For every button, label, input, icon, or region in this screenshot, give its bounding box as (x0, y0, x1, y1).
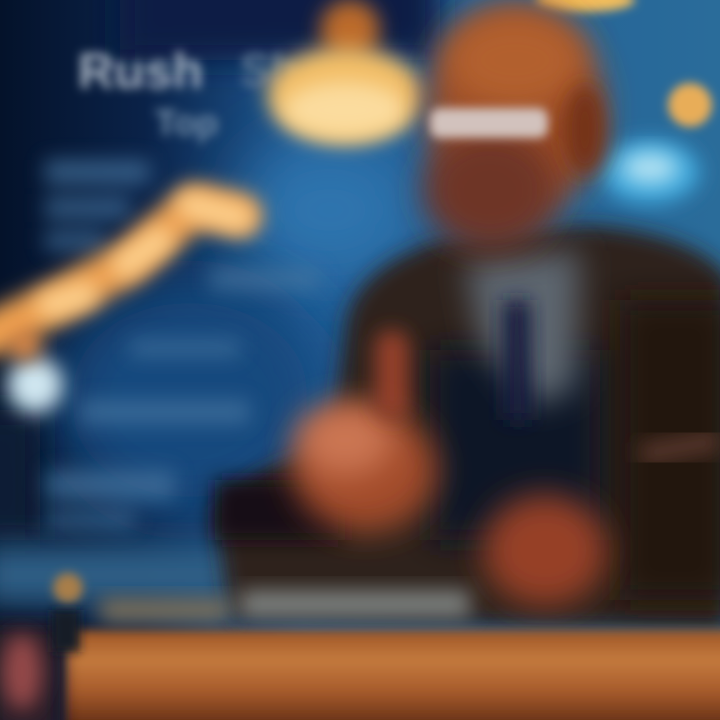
icon: sun (668, 83, 712, 127)
eye band (430, 108, 548, 138)
panel: blurred body text lines (45, 160, 320, 528)
table (0, 625, 720, 720)
suit jacket (215, 225, 720, 630)
subtitle: Top (155, 102, 218, 143)
title (78, 43, 299, 99)
chart: rising arrow (0, 205, 240, 413)
icon: cloud (600, 140, 700, 204)
small red object (2, 634, 42, 710)
papers on table (100, 590, 470, 622)
title: Rush (78, 43, 203, 99)
head (427, 5, 603, 215)
person: businessman (215, 5, 720, 630)
hand: right (483, 494, 607, 606)
hand: thumbs up (293, 330, 437, 532)
tie (503, 300, 532, 420)
title: Sh (240, 44, 299, 96)
icon: ceiling lamp (267, 0, 635, 143)
bottle on table (52, 573, 83, 652)
shirt (465, 250, 580, 405)
